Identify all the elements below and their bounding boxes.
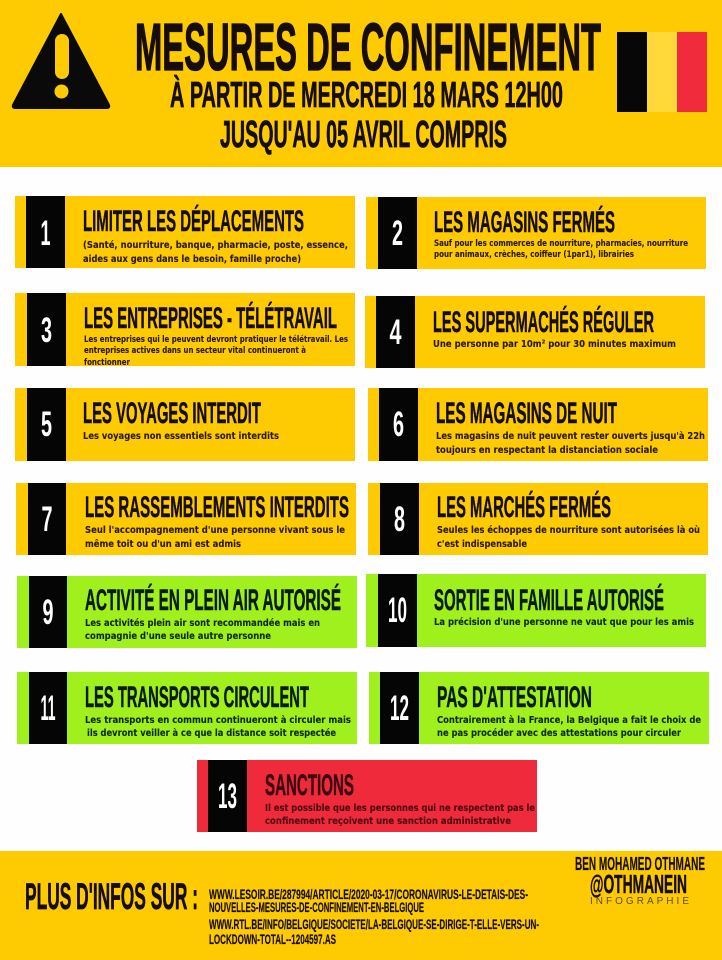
panel: measure 13 sanctions xyxy=(197,760,537,832)
text 13: confinement reçoivent une sanction administrative xyxy=(265,816,511,827)
panel: measure 12: 12 xyxy=(390,689,409,728)
source links: LOCKDOWN-TOTAL--1204597.AS xyxy=(209,932,336,947)
text 7: Seul l'accompagnement d'une personne vivant sous le xyxy=(85,525,345,536)
heading 9: ACTIVITÉ EN PLEIN AIR AUTORISÉ xyxy=(85,583,341,617)
number 2: 2 xyxy=(392,214,403,253)
text 12 xyxy=(437,714,701,739)
text 2: pour animaux, crèches, coiffeur (1par1), librairies xyxy=(434,249,634,260)
panel: measure 1 xyxy=(15,196,355,268)
text 12: ne pas procéder avec des attestations pour circuler xyxy=(437,727,681,739)
text 5: Les voyages non essentiels sont interdits xyxy=(83,431,279,442)
header banner xyxy=(0,0,722,167)
heading 11: LES TRANSPORTS CIRCULENT xyxy=(85,681,309,714)
text 1 xyxy=(83,239,348,265)
number 6: 6 xyxy=(393,405,404,444)
text 13 xyxy=(265,803,535,827)
text 9 xyxy=(85,617,320,642)
panel: measure 4 xyxy=(365,296,705,368)
source links: WWW.LESOIR.BE/287994/ARTICLE/2020-03-17/CORONAVIRUS-LE-DETAIS-DES- xyxy=(209,887,528,902)
panel: measure 10: 10 xyxy=(388,591,407,630)
icon: warning triangle xyxy=(13,14,109,108)
icon: Belgian flag xyxy=(617,32,707,112)
panel: measure 11 xyxy=(17,672,357,744)
number 9: 9 xyxy=(42,593,54,632)
source links: NOUVELLES-MESURES-DE-CONFINEMENT-EN-BELGIQUE xyxy=(209,900,424,915)
author credit xyxy=(575,853,705,907)
text 1: aides aux gens dans le besoin, famille proche) xyxy=(83,254,301,265)
text 8: c'est indispensable xyxy=(437,539,527,550)
source links xyxy=(209,887,539,947)
panel: measure 11: 11 xyxy=(40,689,56,728)
heading 7: LES RASSEMBLEMENTS INTERDITS xyxy=(85,491,349,524)
panel: measure 6 xyxy=(368,388,708,461)
heading 13: SANCTIONS xyxy=(265,769,354,802)
panel: measure 8 xyxy=(368,483,708,555)
text 3: Les entreprises qui le peuvent devront pratiquer le télétravail. Les xyxy=(84,334,348,345)
author credit: INFOGRAPHIE xyxy=(590,896,689,907)
text 6 xyxy=(436,430,705,456)
text 8 xyxy=(437,524,700,550)
text 13: Il est possible que les personnes qui ne respectent pas le xyxy=(265,803,535,814)
number 4: 4 xyxy=(390,313,402,352)
text 4: Une personne par 10m² pour 30 minutes maximum xyxy=(433,339,676,350)
text 9: compagnie d'une seule autre personne xyxy=(85,631,271,642)
panel: measure 9 xyxy=(17,576,357,648)
text 11 xyxy=(85,714,351,739)
number 1: 1 xyxy=(40,214,50,253)
text 7 xyxy=(85,525,345,550)
text 1: (Santé, nourriture, banque, pharmacie, poste, essence, xyxy=(83,239,348,251)
panel: measure 12 xyxy=(369,672,709,744)
text 6: toujours en respectant la distanciation sociale xyxy=(436,445,658,456)
number 8: 8 xyxy=(394,500,405,539)
heading 5: LES VOYAGES INTERDIT xyxy=(83,397,261,430)
number 5: 5 xyxy=(41,405,52,444)
panel: measure 5 xyxy=(15,388,355,461)
heading 3: LES ENTREPRISES - TÉLÉTRAVAIL xyxy=(84,301,337,335)
number 7: 7 xyxy=(42,500,52,539)
text 11: Les transports en commun continueront à circuler mais xyxy=(85,714,351,726)
text 3: entreprises actives dans un secteur vital continueront à xyxy=(84,346,306,356)
panel: measure 7 xyxy=(16,483,356,555)
panel: measure 10 xyxy=(366,574,706,647)
heading 1: LIMITER LES DÉPLACEMENTS xyxy=(83,204,304,238)
footer banner xyxy=(0,851,722,960)
panel: measure 13 sanctions: 13 xyxy=(218,777,237,816)
text 3: fonctionner xyxy=(84,358,131,368)
text 9: Les activités plein air sont recommandée mais en xyxy=(85,617,320,629)
panel: measure 3 xyxy=(15,293,355,368)
text 11: ils devront veiller à ce que la distance soit respectée xyxy=(87,727,336,739)
text 2 xyxy=(434,239,688,260)
text 7: même toit ou d'un ami est admis xyxy=(85,538,241,550)
text 3 xyxy=(84,334,348,368)
number 3: 3 xyxy=(41,311,52,350)
footer banner: PLUS D'INFOS SUR : xyxy=(25,876,198,917)
panel: measure 2 xyxy=(366,197,706,269)
